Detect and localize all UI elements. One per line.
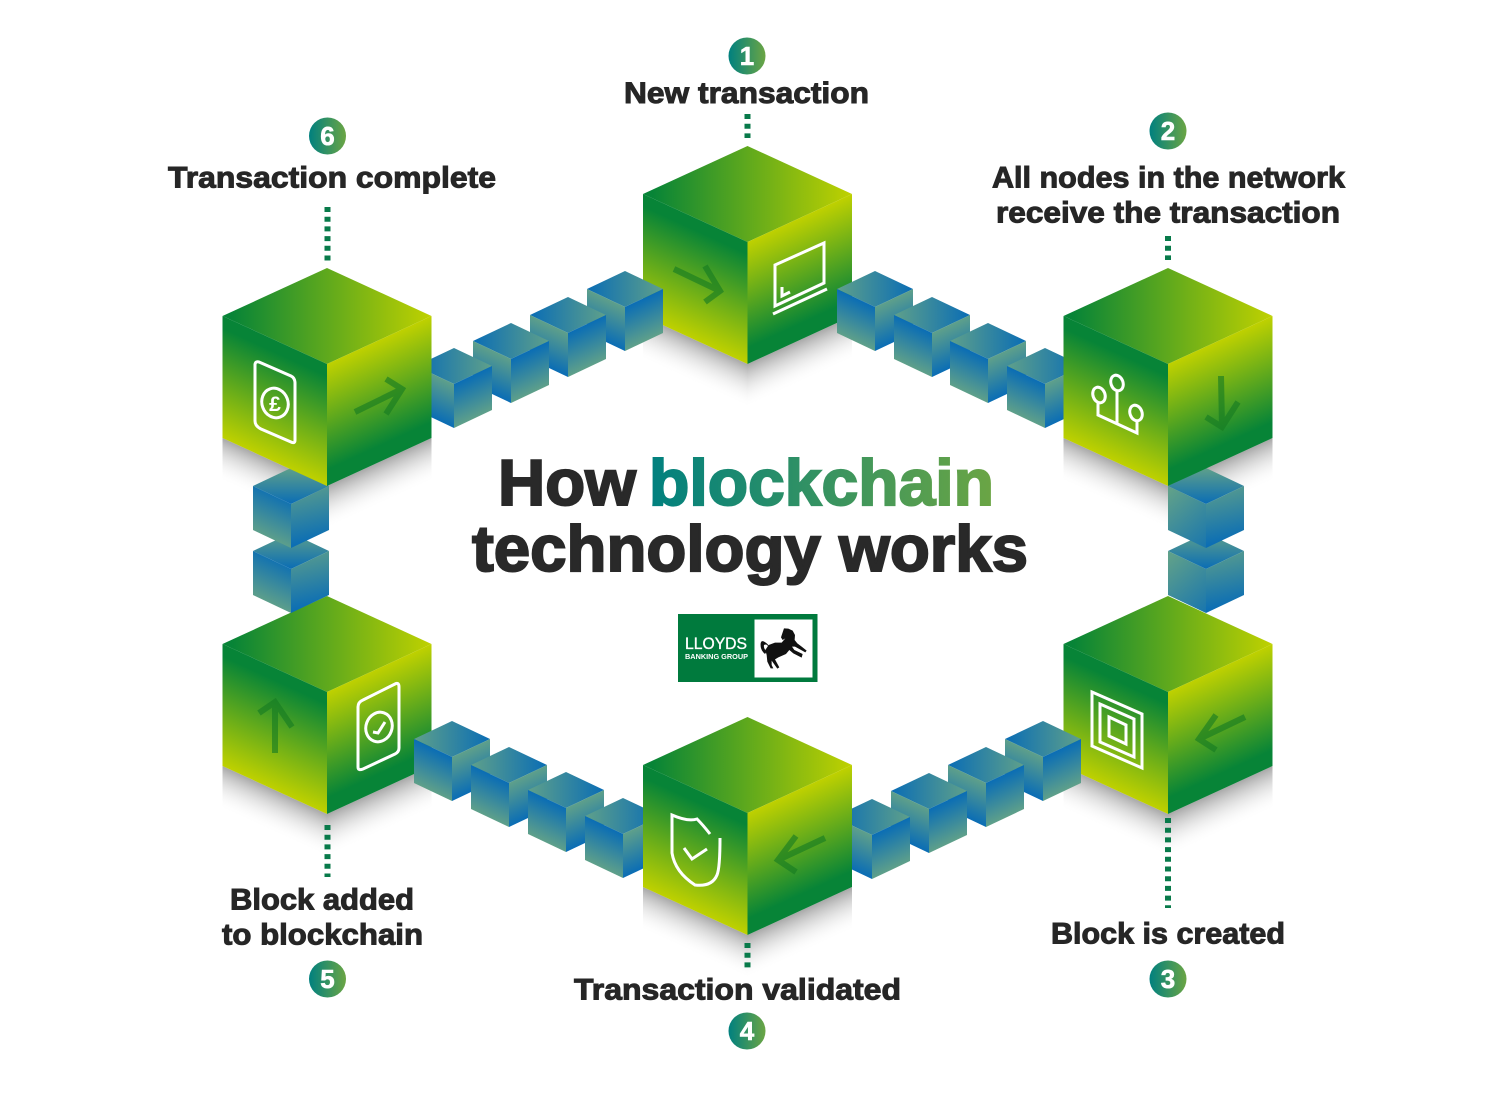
step 4 number bbox=[728, 1012, 766, 1050]
step 2 label: receive the transaction bbox=[996, 196, 1340, 230]
icon: network nodes bbox=[1091, 373, 1144, 433]
icon: laptop bbox=[773, 243, 827, 314]
icon: shield with tick bbox=[672, 815, 720, 885]
step 2 label: All nodes in the network bbox=[992, 162, 1345, 194]
icon: card with pound coin: £ bbox=[269, 393, 281, 416]
step 4 number: 4 bbox=[740, 1016, 755, 1046]
icon: black horse bbox=[761, 628, 807, 669]
step 3 label: Block is created bbox=[1051, 918, 1285, 950]
cube 2: all nodes receive bbox=[1064, 268, 1272, 486]
icon: phone with tick bbox=[358, 683, 399, 770]
arrow: cube 4 bbox=[778, 836, 825, 872]
title bbox=[472, 446, 1028, 585]
arrow: cube 5 bbox=[259, 702, 292, 753]
step 5 number: 5 bbox=[320, 964, 335, 994]
step 2 label bbox=[992, 162, 1345, 230]
step 5 label: to blockchain bbox=[222, 918, 423, 952]
logo: Lloyds Banking Group: LLOYDS bbox=[685, 635, 747, 653]
step 1 number bbox=[728, 38, 766, 74]
cube 6: transaction complete bbox=[222, 268, 432, 486]
step 3 number bbox=[1150, 960, 1186, 998]
block chain: cube 3 to cube 4 bbox=[834, 721, 1081, 879]
title: technology works bbox=[472, 512, 1028, 585]
dotted connector 6 bbox=[324, 207, 330, 263]
block chain: cube 1 to cube 2 bbox=[837, 271, 1083, 428]
step 6 number: 6 bbox=[320, 121, 335, 151]
cube 4: transaction validated bbox=[643, 717, 852, 935]
block chain: cube 4 to cube 5 bbox=[414, 721, 661, 878]
step 5 label bbox=[222, 884, 423, 952]
cube 3: block is created bbox=[1064, 596, 1272, 814]
cube 5: block added to blockchain bbox=[222, 596, 432, 814]
step 6 number bbox=[309, 118, 346, 154]
step 1 number: 1 bbox=[740, 41, 754, 71]
icon: card with pound coin bbox=[255, 362, 295, 443]
step 2 number: 2 bbox=[1161, 116, 1175, 146]
arrow: cube 6 bbox=[355, 379, 402, 414]
dotted connector 1 bbox=[744, 114, 750, 138]
arrow: cube 1 bbox=[674, 266, 720, 302]
title: blockchain bbox=[649, 446, 994, 519]
step 5 number bbox=[309, 960, 346, 998]
step 6 label: Transaction complete bbox=[168, 162, 496, 194]
logo: Lloyds Banking Group: BANKING GROUP bbox=[685, 652, 748, 661]
cube 1: new transaction bbox=[643, 146, 852, 364]
step 4 label: Transaction validated bbox=[574, 974, 901, 1006]
step 1 label: New transaction bbox=[624, 77, 869, 110]
dotted connector 3 bbox=[1165, 818, 1171, 908]
dotted connector 4 bbox=[744, 943, 750, 968]
step 5 label: Block added bbox=[230, 884, 414, 916]
block chain: cube 6 to cube 1 bbox=[416, 271, 663, 428]
icon: concentric squares bbox=[1092, 692, 1142, 768]
block chain: right vertical bbox=[1168, 468, 1244, 613]
block chain: left vertical bbox=[253, 468, 329, 613]
arrow: cube 3 bbox=[1199, 715, 1245, 750]
dotted connector 2 bbox=[1165, 236, 1171, 260]
step 2 number bbox=[1150, 112, 1186, 150]
step 3 number: 3 bbox=[1161, 964, 1175, 994]
cube shadows bbox=[222, 316, 1272, 979]
arrow: cube 2 bbox=[1206, 376, 1238, 427]
logo: Lloyds Banking Group bbox=[678, 614, 818, 682]
title: How bbox=[498, 446, 636, 519]
dotted connector 5 bbox=[324, 825, 330, 877]
